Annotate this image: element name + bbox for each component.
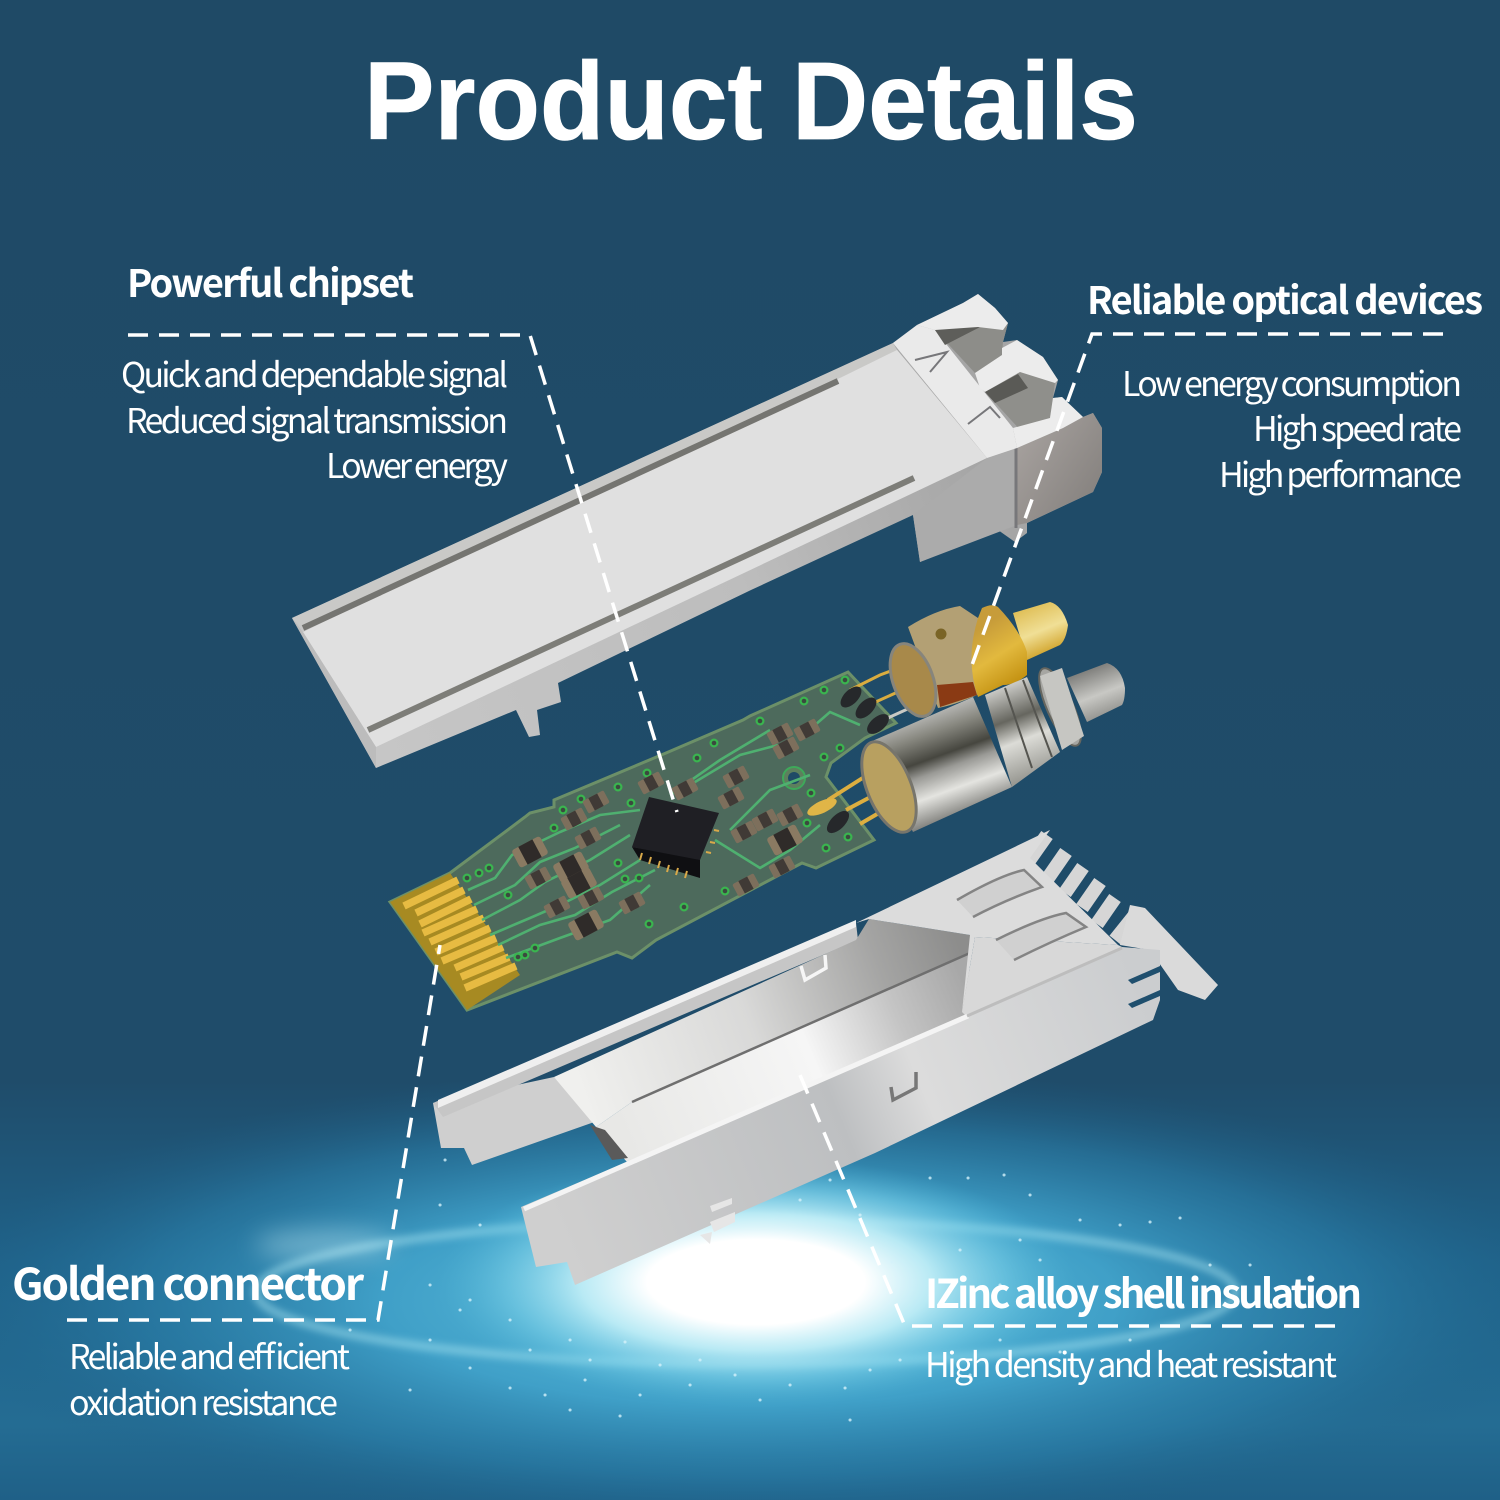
upper groove: [303, 381, 838, 628]
gold contact fingers: [404, 880, 516, 988]
vias: [464, 677, 851, 960]
tab teeth: [1028, 835, 1135, 940]
U notch on rail: [801, 955, 826, 980]
spring clip lower: [996, 913, 1086, 960]
leader line: [800, 1075, 1335, 1326]
copper traces: [468, 712, 860, 958]
back face: [851, 734, 927, 840]
description: Low energy consumption: [1122, 357, 1462, 406]
callout: zinc alloy shell: [800, 1075, 1362, 1387]
heading: Reliable optical devices: [1087, 270, 1483, 325]
surface mount components: [511, 718, 821, 941]
circuit board: [390, 672, 896, 1010]
left edge strip: [292, 618, 376, 768]
right end cap: [1017, 413, 1102, 525]
lower optical component: silver transmitter: [805, 663, 1125, 840]
description: High performance: [1219, 448, 1462, 497]
description: High speed rate: [1253, 402, 1462, 451]
callout: powerful chipset: [121, 253, 677, 812]
description: High density and heat resistant: [925, 1338, 1337, 1387]
description: [121, 348, 508, 488]
front light band: [893, 325, 1017, 458]
spring tail: [1120, 905, 1218, 1000]
description: [1122, 357, 1462, 497]
shell top face: [303, 345, 987, 747]
solder blobs: [837, 683, 892, 738]
shell silhouette and side wall: [292, 294, 1102, 768]
description: Quick and dependable signal: [121, 348, 508, 397]
side clips: [700, 1198, 735, 1244]
rod: [1067, 663, 1125, 722]
neck rings: [985, 677, 1060, 787]
bottom metal cage: [433, 830, 1218, 1285]
band marks: [915, 352, 1000, 424]
right edge notches: [1128, 966, 1160, 1008]
rear foot and side: [913, 448, 1017, 562]
cylinder body: [870, 697, 1012, 832]
leader line: [972, 334, 1443, 665]
heading: Powerful chipset: [127, 253, 414, 308]
mounting hole: [783, 767, 805, 789]
heading: Golden connector: [12, 1249, 365, 1313]
yellow edge substrate: [390, 873, 520, 1010]
upper rail: [433, 923, 858, 1117]
leader line: [67, 945, 440, 1320]
pins and wires to board: [850, 662, 923, 725]
left rear tab: [433, 1077, 600, 1165]
solder blob: [823, 807, 853, 837]
description: Reduced signal transmission: [126, 394, 508, 443]
board substrate: [390, 672, 896, 1010]
description: Lower energy: [326, 439, 508, 488]
LC port recess upper: [935, 318, 1008, 373]
pins to board: [828, 765, 896, 824]
amber tube: [1013, 602, 1068, 660]
callout: reliable optical devices: [972, 270, 1483, 665]
top metal shell: [292, 294, 1102, 768]
upper optical component: yellow receiver: [837, 602, 1068, 738]
amber collar: [972, 605, 1027, 697]
front upper plate: [962, 937, 1122, 1017]
description: oxidation resistance: [69, 1376, 338, 1425]
middle divider: [975, 340, 1058, 400]
flange: [1031, 663, 1089, 751]
front wall panel: [521, 947, 1160, 1285]
translucent tan body: [908, 606, 994, 708]
rear upper plate: [856, 830, 1118, 1012]
description: Reliable and efficient: [69, 1330, 350, 1379]
floor seam: [632, 953, 970, 1102]
leader line: [128, 335, 677, 812]
red brown resin: [937, 682, 977, 707]
upper edge rail: [292, 343, 897, 628]
front fold highlight: [524, 1016, 968, 1209]
cavity back wall: [554, 919, 970, 1127]
solder tab: [805, 795, 839, 819]
LC port recess lower: [985, 372, 1055, 432]
lower groove: [368, 478, 914, 730]
callout: golden connector: [12, 945, 440, 1425]
U notch on panel: [891, 1072, 916, 1100]
spring clip upper: [957, 870, 1042, 917]
description: [69, 1330, 350, 1425]
ring grooves: [1005, 680, 1052, 768]
dark inner shadow: [590, 1125, 628, 1160]
cavity floor: [596, 953, 970, 1162]
heading: IZinc alloy shell insulation: [925, 1262, 1362, 1320]
LC port post upper: [917, 294, 1008, 330]
can back face: [881, 637, 945, 723]
title: Product Details: [364, 40, 1138, 163]
black processor chip: [632, 797, 719, 878]
right port post: [1013, 397, 1083, 448]
